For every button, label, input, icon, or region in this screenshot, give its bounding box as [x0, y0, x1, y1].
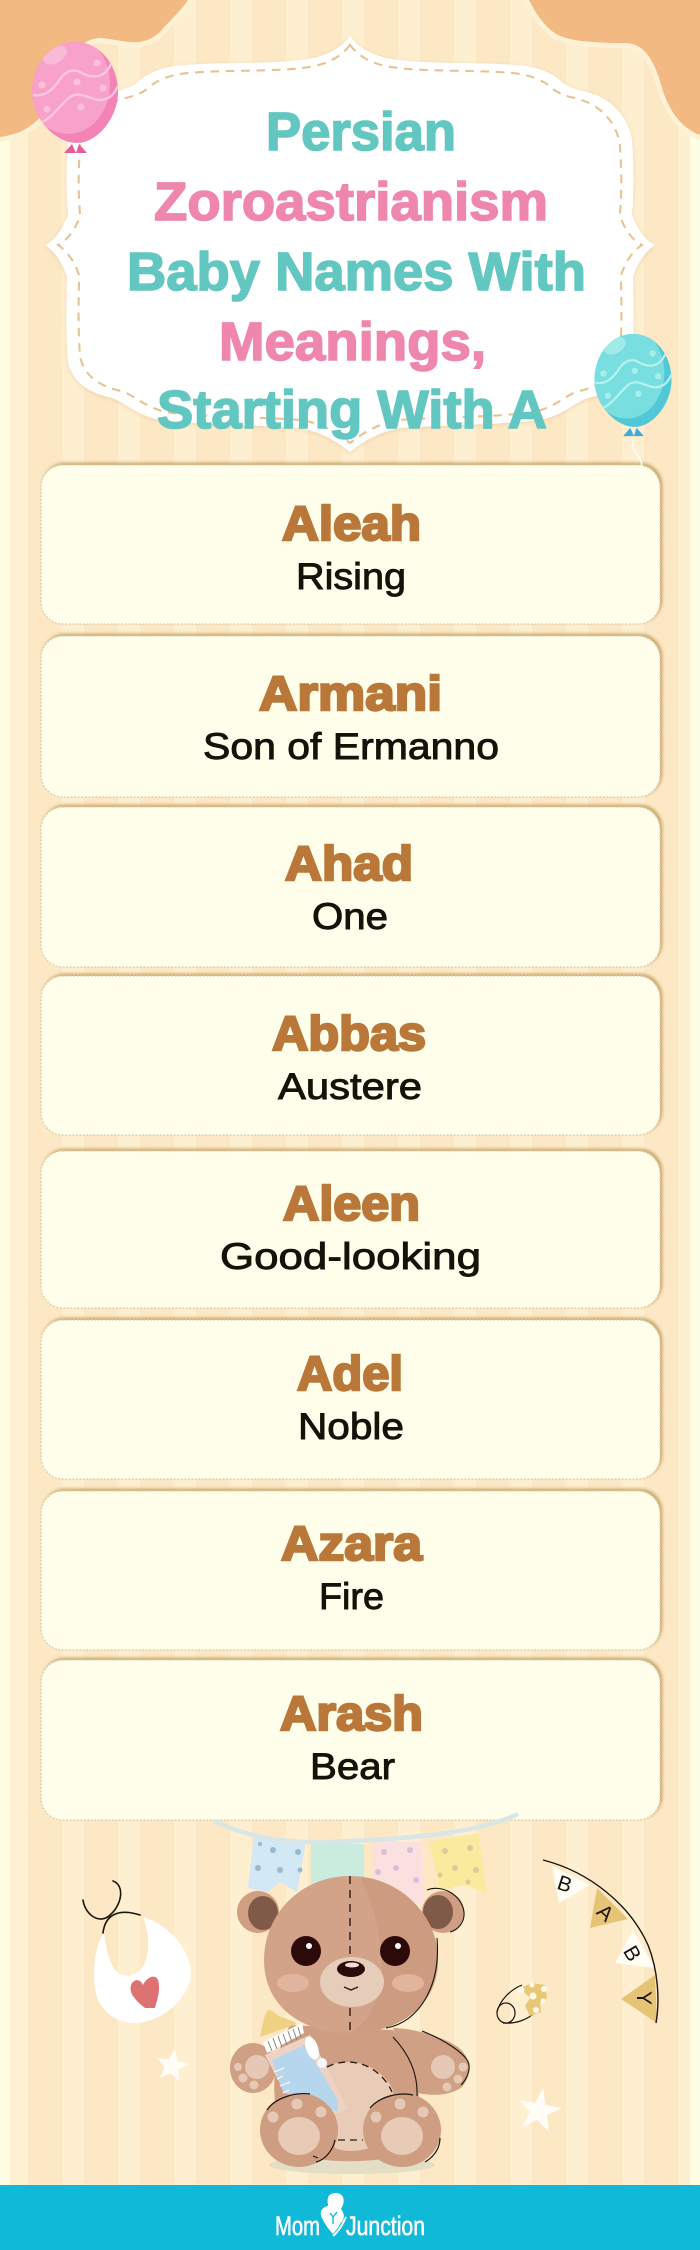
- card: Abbas: Abbas: [272, 1008, 426, 1061]
- icon: BABY bunting: Y: [632, 1991, 655, 2005]
- right leg: [363, 2093, 441, 2167]
- card: Aleah: [41, 465, 660, 624]
- card: Aleen: [41, 1151, 660, 1308]
- logo: MomJunction: Junction: [346, 2211, 425, 2241]
- icon: BABY bunting: B: [618, 1942, 645, 1966]
- icon: BABY bunting: [543, 1860, 658, 2023]
- card: Aleah: Aleah: [282, 498, 421, 551]
- title: [127, 102, 586, 440]
- title: Starting With A: [157, 380, 547, 440]
- icon: BABY bunting: B: [554, 1871, 575, 1898]
- title: Persian: [266, 102, 456, 162]
- balloon string: [633, 441, 642, 474]
- icon: mother and child: [321, 2193, 346, 2236]
- nose and mouth: [337, 1961, 365, 1990]
- icon: safety pin: [497, 1982, 547, 2023]
- card: Aleen: Good-looking: [220, 1236, 481, 1277]
- card: Adel: Noble: [298, 1406, 404, 1447]
- left arm: [230, 2043, 276, 2093]
- logo: MomJunction: [275, 2193, 425, 2241]
- icon: small star: [157, 2049, 189, 2081]
- logo: MomJunction: Mom: [275, 2211, 320, 2241]
- head seam: [349, 1876, 351, 2033]
- icon: teddy bear with bottle: [230, 1876, 469, 2174]
- card: Armani: [41, 636, 660, 797]
- icon: pink balloon: [32, 42, 118, 153]
- card: Aleen: Aleen: [283, 1178, 420, 1231]
- card: Armani: Armani: [259, 668, 442, 721]
- icon: baby bib: [83, 1881, 191, 2023]
- card: Arash: Bear: [310, 1746, 395, 1787]
- card: Ahad: [41, 807, 660, 967]
- icon: teal balloon: [594, 334, 672, 436]
- card: Azara: Fire: [319, 1576, 384, 1617]
- bottle: [260, 2010, 347, 2114]
- card: Arash: Arash: [280, 1688, 423, 1741]
- right ear: [422, 1888, 464, 1933]
- card: Ahad: Ahad: [285, 838, 413, 891]
- title plaque: [45, 36, 655, 452]
- card: Aleah: Rising: [296, 556, 406, 597]
- body outlines: [393, 2031, 469, 2096]
- title: Baby Names With: [127, 242, 586, 302]
- icon: large star: [519, 2088, 562, 2132]
- card: Armani: Son of Ermanno: [203, 726, 499, 767]
- top drape: right: [529, 0, 700, 135]
- bunting flags: [214, 1814, 518, 1905]
- right arm: [393, 2028, 469, 2095]
- card: Arash: [41, 1660, 660, 1820]
- belly patch: [322, 2062, 393, 2151]
- footer bar: [0, 2185, 700, 2250]
- card: Ahad: One: [312, 896, 388, 937]
- card: Adel: Adel: [297, 1348, 403, 1401]
- left ear: [237, 1891, 279, 1933]
- ground shadow: [269, 2156, 435, 2174]
- icon: BABY bunting: A: [592, 1900, 618, 1926]
- body: [274, 2025, 420, 2161]
- cheeks: [277, 1974, 424, 1992]
- head: [264, 1876, 438, 2033]
- card: Azara: [41, 1491, 660, 1650]
- card: Abbas: Austere: [278, 1066, 422, 1107]
- muzzle: [320, 1957, 384, 2007]
- title: Zoroastrianism: [154, 172, 548, 232]
- left leg: [260, 2093, 338, 2167]
- top drape: left: [0, 0, 188, 137]
- card: Azara: Azara: [281, 1518, 422, 1571]
- paw pads on arms: [234, 2055, 468, 2092]
- card: Abbas: [41, 976, 660, 1135]
- title: Meanings,: [219, 312, 486, 372]
- card: Adel: [41, 1320, 660, 1479]
- eyes: [291, 1936, 410, 1966]
